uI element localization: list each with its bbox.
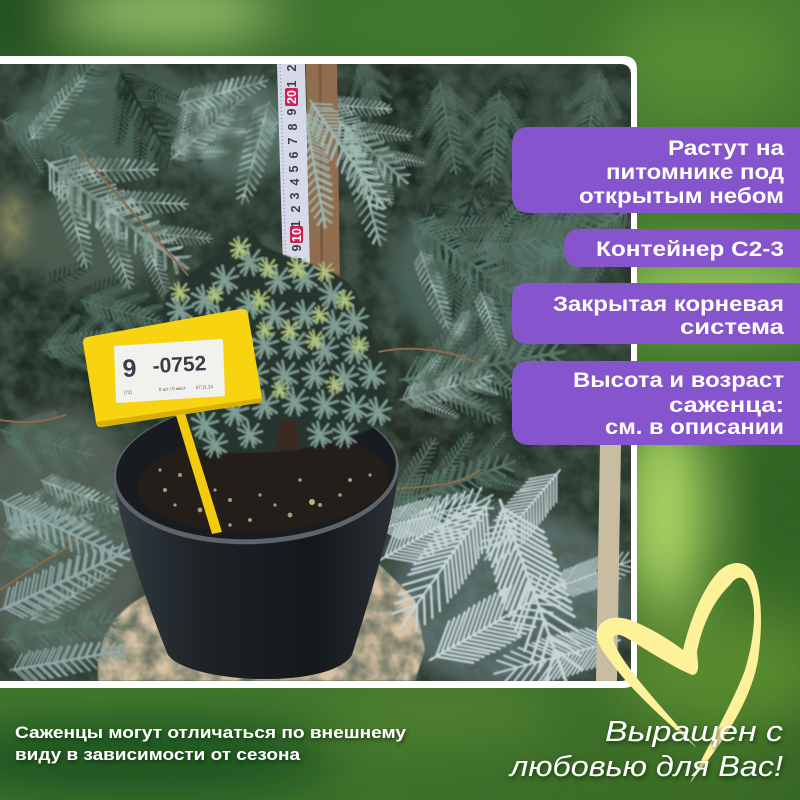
silver fir branches lower right: [380, 468, 631, 681]
wooden stake: [306, 64, 340, 290]
photo background tones: [0, 60, 630, 690]
slogan: [508, 716, 784, 783]
pale trunk lower right: [596, 445, 621, 681]
panel: growing conditions: открытым небом: [579, 185, 784, 208]
yellow plant tag: (72): [124, 390, 133, 395]
disclaimer text: [15, 724, 407, 764]
measuring tape: 10: [290, 228, 304, 242]
blue-grey fir branches: [0, 74, 551, 624]
panel: growing conditions: Растут на: [668, 137, 784, 160]
measuring tape: 9: [290, 244, 304, 251]
seedling: compact fir: [163, 236, 391, 457]
measuring tape: 9: [285, 108, 299, 115]
disclaimer text: Саженцы могут отличаться по внешнему: [15, 724, 407, 742]
panel: root system: [512, 283, 800, 344]
panel: growing conditions: питомнике под: [606, 161, 784, 184]
photo frame: [0, 56, 637, 688]
panel: root system: система: [680, 316, 784, 339]
panel: root system: Закрытая корневая: [553, 293, 784, 316]
yellow plant tag: 9: [122, 354, 137, 383]
panel: height and age: см. в описании: [605, 416, 784, 439]
disclaimer text: виду в зависимости от сезона: [15, 746, 301, 764]
measuring tape: 3: [288, 192, 302, 199]
measuring tape: 7: [286, 137, 300, 144]
dark fir branches: [1, 70, 540, 516]
measuring tape: 20: [285, 90, 299, 104]
mottled shadows over foliage: [0, 64, 631, 681]
branches over stake: [306, 98, 391, 230]
left lower needles: [0, 485, 138, 685]
panel: container size: Контейнер С2-3: [596, 238, 784, 261]
panel: height and age: Высота и возраст: [573, 369, 784, 392]
slogan: любовью для Вас!: [508, 751, 783, 783]
measuring tape: 1: [289, 220, 303, 227]
yellow plant tag: 0 шт / 0 мест: [159, 386, 186, 392]
measuring tape: 6: [287, 151, 301, 158]
panel: height and age: [512, 361, 800, 445]
panel: growing conditions: [512, 127, 800, 213]
slogan: Выращен с: [605, 716, 784, 748]
yellow plant tag: -0752: [152, 352, 207, 378]
sawdust ground: [98, 560, 425, 681]
measuring tape: 2: [285, 64, 299, 71]
panel: height and age: саженца:: [669, 394, 784, 417]
measuring tape: 2: [289, 205, 303, 212]
soil specks: [158, 468, 372, 527]
brown twigs: [0, 150, 480, 590]
measuring tape: 8: [286, 123, 300, 130]
photo: seedling in pot among fir branches: [0, 64, 631, 681]
measuring tape: 1: [285, 80, 299, 87]
info panels: [512, 127, 800, 445]
yellow plant tag: 07.11.24: [196, 384, 214, 390]
pot: [113, 416, 399, 679]
measuring tape: 8: [291, 257, 305, 264]
measuring tape: 4: [288, 178, 302, 185]
mid green fir branches: [0, 64, 628, 672]
yellow plant tag: [83, 309, 262, 534]
panel: container size: [564, 229, 800, 267]
measuring tape: [277, 64, 310, 268]
icon: hand-drawn heart: [596, 563, 761, 783]
measuring tape: 5: [287, 165, 301, 172]
